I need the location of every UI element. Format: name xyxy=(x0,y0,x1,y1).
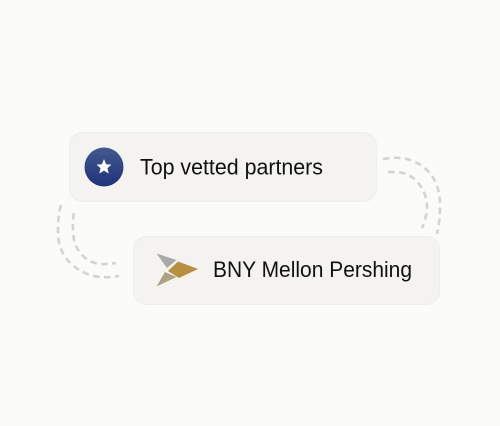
label: BNY Mellon Pershing: BNY Mellon Pershing xyxy=(213,257,412,282)
card: top vetted partners xyxy=(70,132,376,202)
card: BNY Mellon Pershing xyxy=(134,236,440,304)
icon: blue star badge xyxy=(84,148,124,186)
connector: top right dashed arcs xyxy=(383,158,440,234)
icon: BNY Mellon logo xyxy=(156,254,198,286)
connector: bottom left dashed arcs xyxy=(58,205,119,277)
label: top vetted partners: Top vetted partners xyxy=(140,154,323,180)
